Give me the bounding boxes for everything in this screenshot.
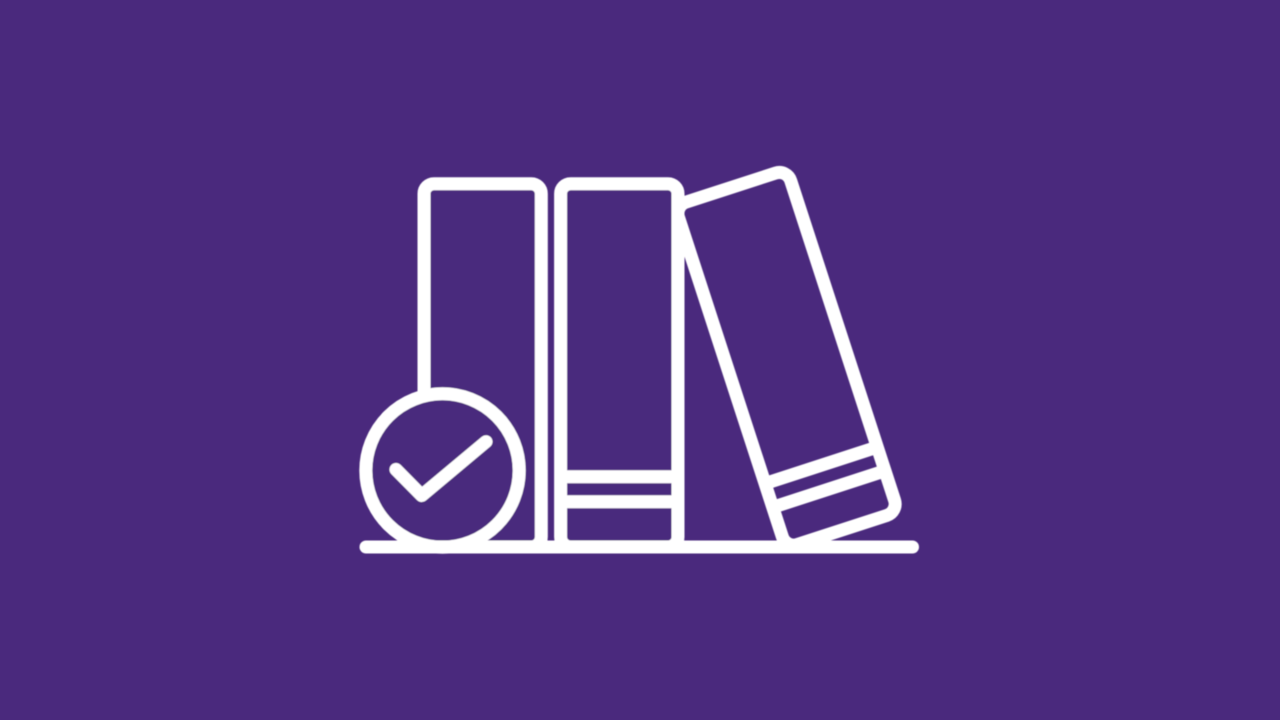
icon: left upright book — [424, 184, 541, 547]
icon: middle upright book — [561, 184, 678, 547]
icon: books on a shelf with check mark — [358, 165, 920, 554]
icon: check mark badge — [366, 394, 519, 547]
icon: leaning book — [675, 169, 898, 548]
icon: shelf — [366, 540, 912, 554]
